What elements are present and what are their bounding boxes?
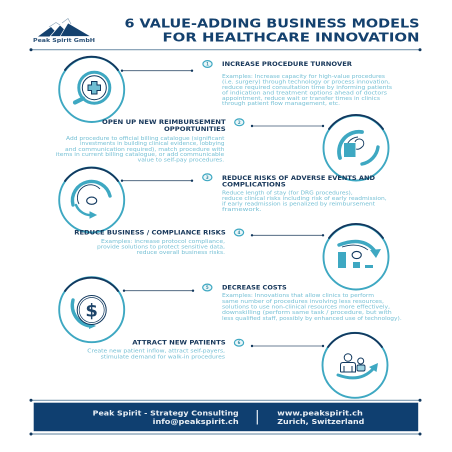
footer website and location <box>277 409 364 426</box>
panel: 2 open up new reimbursement opportunities <box>56 115 388 180</box>
body text <box>87 348 225 360</box>
body text: Examples: Innovations that allow clinics to perform <box>222 293 374 299</box>
body text: Add procedure to official billing catalogue (significant <box>66 136 224 142</box>
body text: downskilling (perform same task / procedure, but with <box>222 310 392 316</box>
title <box>124 16 420 44</box>
footer band <box>30 399 422 436</box>
number badge 1: 1 <box>206 62 209 66</box>
title: 6 VALUE-ADDING BUSINESS MODELS <box>124 16 420 30</box>
body text: solutions to use non-clinical resources more effectively, <box>222 304 390 310</box>
body text: value to self-pay procedures. <box>138 158 225 164</box>
body text: Create new patient inflow, attract self-payers, <box>87 348 225 354</box>
body text: provide solutions to protect sensitive data, <box>97 244 225 250</box>
body text: reduce clinical risks including risk of early readmission, <box>222 196 387 202</box>
connector arrow <box>123 290 194 292</box>
number badge 4 <box>234 229 244 236</box>
icon: magnifier with medical cross <box>59 57 124 122</box>
body text: reduce required consultation time by informing patients <box>222 85 392 91</box>
body text: if early readmission is penalized by reimbursement <box>222 202 375 208</box>
footer divider <box>256 410 258 424</box>
heading <box>222 175 375 188</box>
body text <box>56 136 225 164</box>
number badge 4: 4 <box>238 230 241 235</box>
body text: through patient flow management, etc. <box>222 101 340 107</box>
footer website and location: www.peakspirit.ch <box>277 409 363 417</box>
heading: REDUCE RISKS OF ADVERSE EVENTS AND <box>222 175 375 182</box>
number badge 3 <box>203 174 212 181</box>
number badge 2 <box>235 119 244 126</box>
title: FOR HEALTHCARE INNOVATION <box>162 30 420 44</box>
number badge 5: 5 <box>206 285 209 290</box>
panel: 5 decrease costs <box>59 277 402 342</box>
heading: INCREASE PROCEDURE TURNOVER <box>222 61 352 68</box>
body text <box>97 239 225 256</box>
number badge 6 <box>234 339 244 346</box>
body text: of indication and treatment options ahead of doctors <box>222 90 387 96</box>
heading: REDUCE BUSINESS / COMPLIANCE RISKS <box>74 230 226 236</box>
connector arrow <box>251 125 324 127</box>
logo <box>33 18 95 44</box>
icon: cycle with arrow <box>59 168 124 232</box>
body text: and communication required), match procedure with <box>65 147 225 153</box>
number badge 5 <box>203 284 212 291</box>
panel: 6 attract new patients <box>87 333 388 398</box>
number badge 1 <box>203 61 212 67</box>
body text: less qualified staff, possibly by enhanced use of technology). <box>222 316 402 322</box>
connector arrow <box>251 345 324 347</box>
icon: dollar coin with arrow: $ <box>85 300 98 322</box>
footer website and location: Zurich, Switzerland <box>277 418 364 426</box>
icon: dollar coin with arrow <box>59 277 124 342</box>
header rule <box>30 48 422 51</box>
footer company and email <box>93 409 239 426</box>
body text: Reduce length of stay (for DRG procedures), <box>222 190 353 196</box>
heading: OPPORTUNITIES <box>164 126 226 133</box>
body text: framework. <box>222 207 262 213</box>
heading: DECREASE COSTS <box>222 284 287 292</box>
panel: 4 reduce business / compliance risks <box>74 224 389 290</box>
body text: items in current billing catalogue, or add communicable <box>56 152 225 158</box>
body text: stimulate demand for walk-in procedures <box>101 354 225 360</box>
body text: investments in building clinical evidence, lobbying <box>80 141 224 147</box>
heading <box>102 119 226 133</box>
connector arrow <box>121 70 193 72</box>
number badge 3: 3 <box>206 175 209 180</box>
body text: same number of procedures involving less resources, <box>222 299 384 305</box>
icon: patients with rising arrow <box>322 333 388 398</box>
body text: (i.e. surgery) through technology or process innovation, <box>222 79 390 85</box>
footer company and email: info@peakspirit.ch <box>153 418 239 426</box>
number badge 6: 6 <box>238 340 241 345</box>
connector arrow <box>251 234 324 236</box>
body text: reduce overall business risks. <box>137 250 225 256</box>
icon: reimbursement cycle <box>324 115 388 180</box>
panel: 1 increase procedure turnover <box>59 57 392 122</box>
body text: Examples: increase protocol compliance, <box>101 239 225 245</box>
logo: Peak Spirit GmbH <box>33 38 95 44</box>
panel: 3 reduce risks of adverse events <box>59 168 387 232</box>
footer company and email: Peak Spirit - Strategy Consulting <box>93 409 239 417</box>
number badge 2: 2 <box>238 120 241 125</box>
body text <box>222 74 392 107</box>
heading: OPEN UP NEW REIMBURSEMENT <box>102 119 226 126</box>
body text <box>222 293 402 322</box>
heading: COMPLICATIONS <box>222 181 286 188</box>
body text: appointment, reduce wait or transfer times in clinics <box>222 96 380 102</box>
body text <box>222 190 387 213</box>
heading: ATTRACT NEW PATIENTS <box>132 340 226 346</box>
icon: falling bars with arrow <box>324 224 388 290</box>
connector arrow <box>121 180 193 182</box>
body text: Examples: Increase capacity for high-value procedures <box>222 74 385 80</box>
